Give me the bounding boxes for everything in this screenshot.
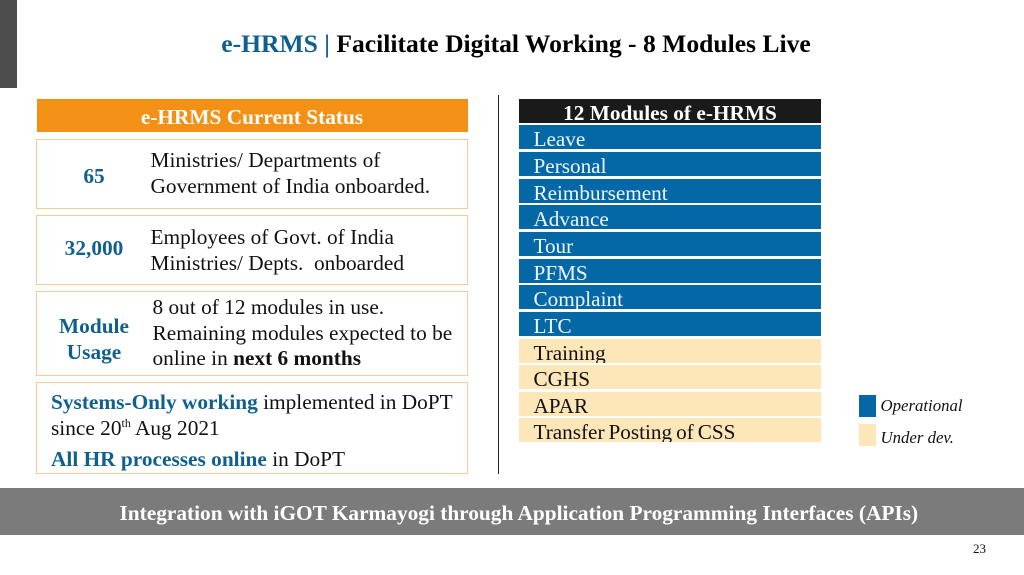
module: Transfer Posting of CSS <box>519 418 821 442</box>
banner: iGOT integration: Integration with iGOT Karmayogi through Application Programming Interfaces (APIs) <box>120 501 918 525</box>
module: PFMS <box>519 259 821 283</box>
module: Personal <box>519 152 821 176</box>
text: employees description: Employees of Govt. of India <box>150 225 394 249</box>
legend swatch: operational <box>859 395 876 417</box>
module: Complaint <box>519 285 821 309</box>
legend label: operational: Operational <box>880 396 963 415</box>
label: module usage: Module <box>59 314 129 338</box>
heading: 12 modules: 12 Modules of e-HRMS <box>563 101 777 125</box>
heading: current status: e-HRMS Current Status <box>141 105 363 129</box>
heading: 12 modules <box>519 99 821 123</box>
module: Reimbursement <box>519 179 821 203</box>
module: Training <box>519 339 821 363</box>
banner: iGOT integration <box>0 488 1024 535</box>
legend label: under development: Under dev. <box>880 428 954 447</box>
legend swatch: under development <box>859 424 876 446</box>
legend <box>859 395 963 447</box>
panel: systems-only working <box>36 382 468 474</box>
module: Leave <box>519 125 821 149</box>
panel: employees onboarded <box>36 215 468 285</box>
module: Advance <box>519 205 821 229</box>
module: CGHS <box>519 365 821 389</box>
panel: ministries onboarded <box>36 139 468 209</box>
module: LTC <box>519 312 821 336</box>
page number: 23 <box>973 541 986 556</box>
text: ministries description: Government of India onboarded. <box>150 174 430 198</box>
module: Tour <box>519 232 821 256</box>
panel: module usage <box>36 291 468 376</box>
label: module usage: Usage <box>67 340 121 364</box>
corner accent block <box>0 0 17 88</box>
text: employees description: Ministries/ Depts. onboarded <box>150 250 404 274</box>
label: module usage <box>59 314 129 364</box>
text: module usage description: Remaining modules expected to be <box>152 320 452 344</box>
text: all HR processes online: All HR processes online in DoPT <box>51 447 345 471</box>
vertical divider <box>498 95 499 474</box>
text: systems-only working: since 20th Aug 2021 <box>51 415 220 440</box>
text: ministries description: Ministries/ Departments of <box>150 148 380 172</box>
module: APAR <box>519 392 821 416</box>
stat: 65: 65 <box>83 164 105 188</box>
text: systems-only working <box>51 390 453 440</box>
text: ministries description <box>150 148 430 198</box>
text: systems-only working: Systems-Only working implemented in DoPT <box>51 390 453 414</box>
text: module usage description: 8 out of 12 modules in use. <box>152 295 384 319</box>
text: employees description <box>150 225 404 274</box>
stat: 32,000: 32,000 <box>65 236 123 260</box>
title: e-HRMS | Facilitate Digital Working - 8 Modules Live <box>221 29 811 58</box>
heading: current status <box>36 99 468 132</box>
text: module usage description <box>152 295 452 370</box>
text: module usage description: online in next 6 months <box>152 346 361 370</box>
